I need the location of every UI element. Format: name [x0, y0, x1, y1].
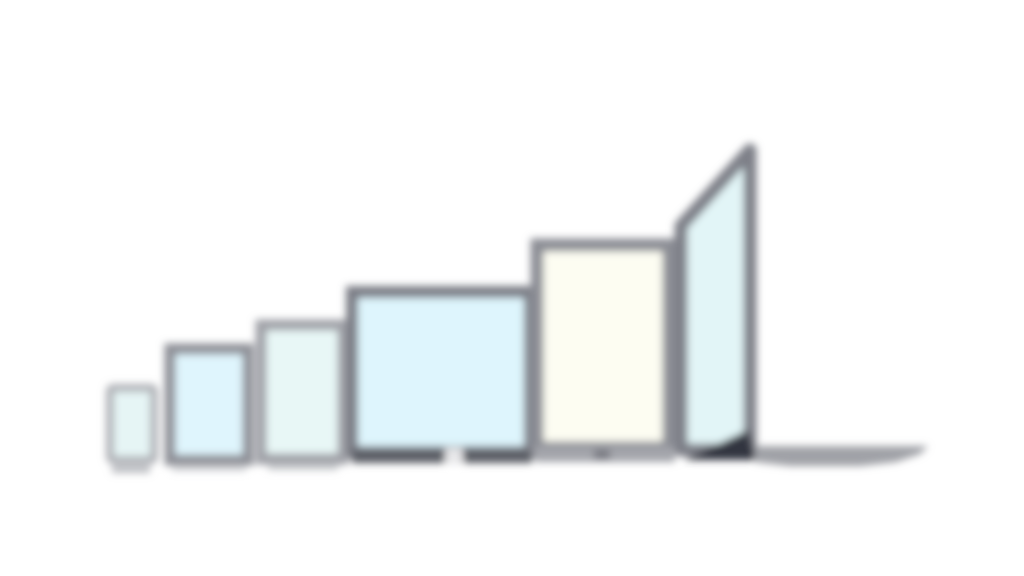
icon: small tablet: [170, 349, 248, 471]
icon: portrait display: [535, 245, 675, 462]
icon: smartphone: [110, 388, 154, 473]
icon: large tablet: [261, 325, 343, 470]
icon: open laptop: [681, 150, 928, 466]
icon: widescreen monitor: [352, 292, 532, 464]
